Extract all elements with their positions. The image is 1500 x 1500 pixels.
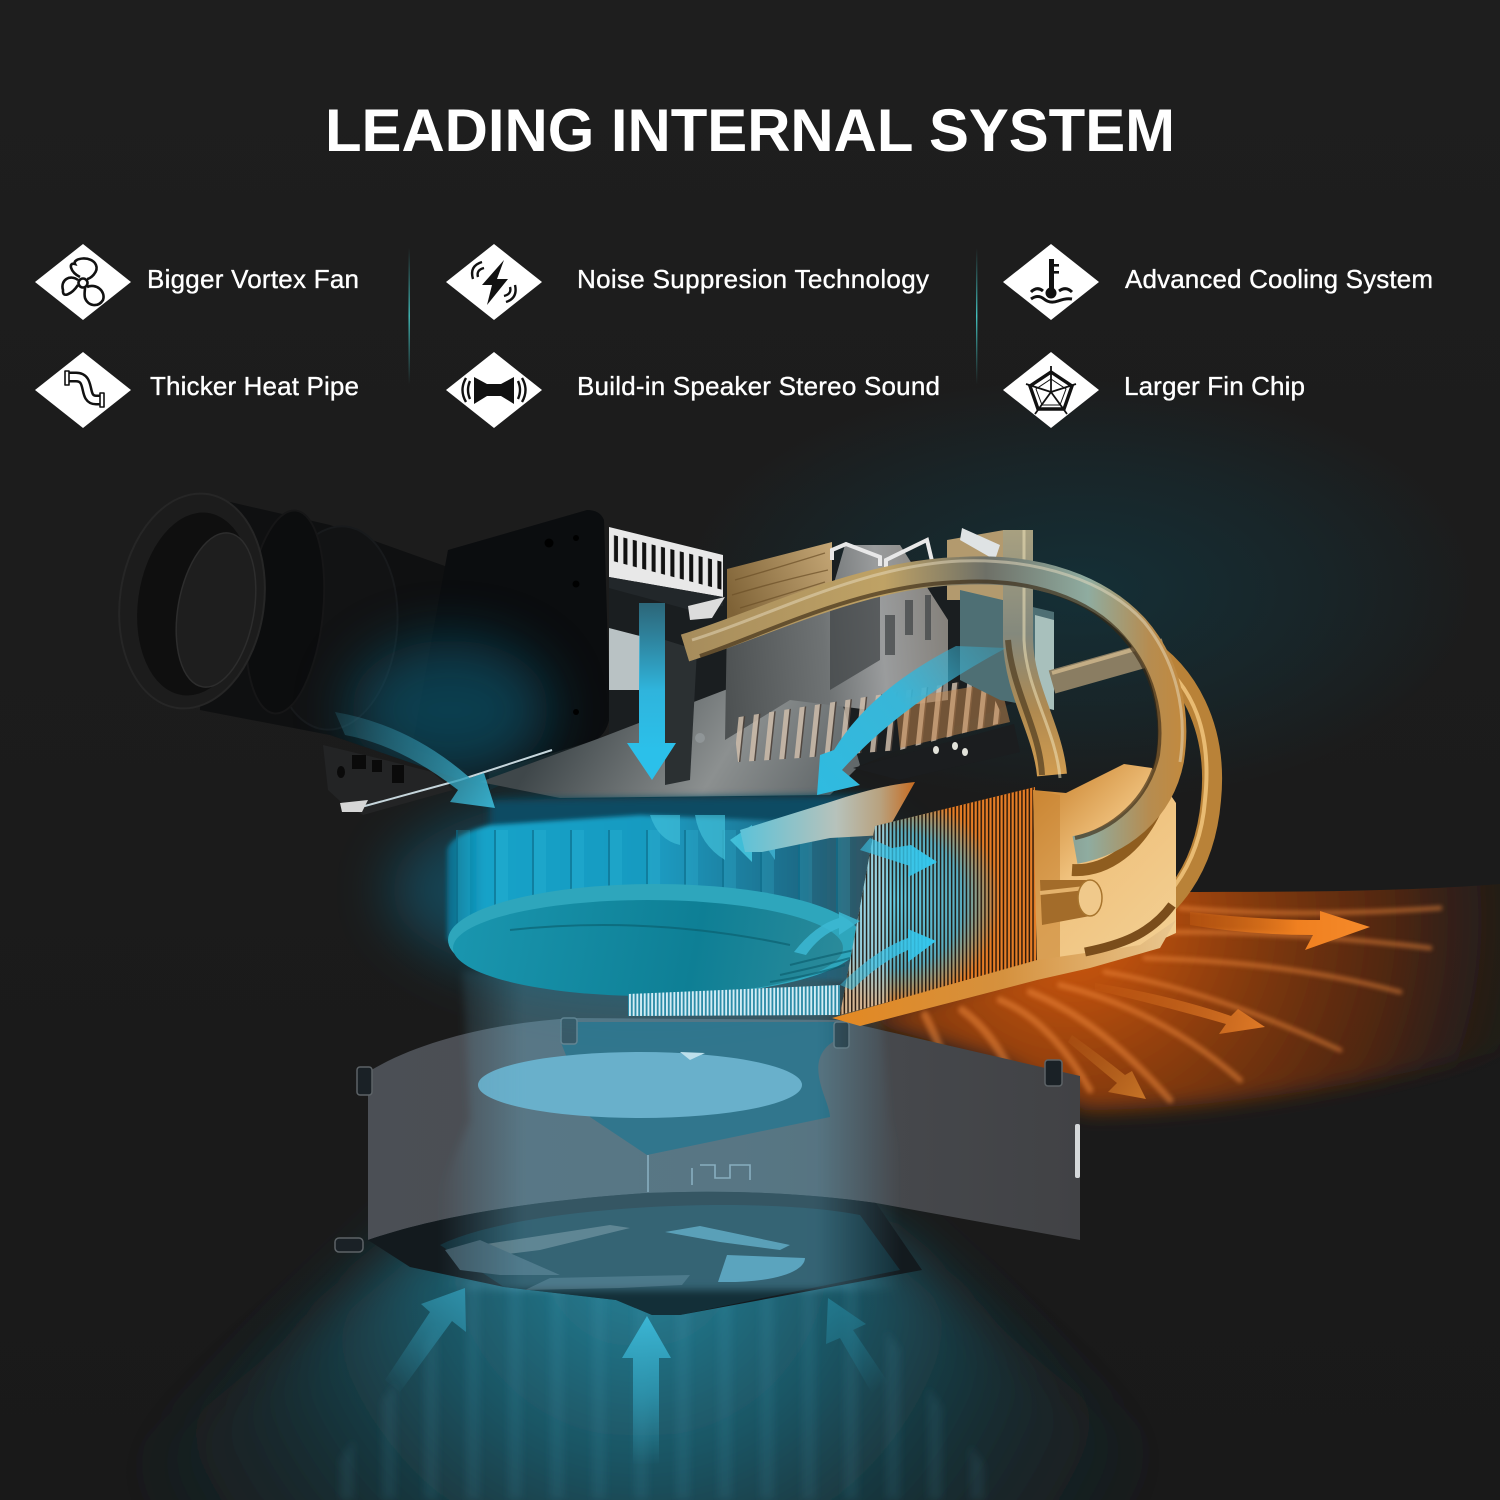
drum top blades xyxy=(650,815,775,862)
white top brackets xyxy=(832,540,932,575)
cold air column xyxy=(400,970,940,1290)
copper lower pins xyxy=(895,682,1010,748)
white comb heatsink xyxy=(609,527,723,597)
label: Build-in Speaker Stereo Sound: Build-in Speaker Stereo Sound xyxy=(577,371,940,401)
copper bottom bar xyxy=(832,920,1176,1026)
white strip fins xyxy=(628,985,840,1016)
label: Advanced Cooling System: Advanced Cooling System xyxy=(1125,264,1433,294)
black mounting plate xyxy=(412,510,610,775)
back pipe highlight xyxy=(1052,642,1160,673)
left pale fade xyxy=(838,820,888,1020)
arrow: intake right xyxy=(826,1298,890,1395)
arrow: fins lower xyxy=(840,929,936,990)
projector lens xyxy=(106,484,610,815)
clip xyxy=(688,597,725,620)
icon: speaker xyxy=(446,352,542,428)
top opening xyxy=(560,1022,836,1155)
cone glow xyxy=(20,1230,1280,1500)
teal glow on lens xyxy=(350,640,550,780)
lower shell xyxy=(335,1018,1080,1315)
arrow: intake centre xyxy=(622,1316,671,1465)
blue cooled area on fins xyxy=(840,787,1037,1015)
label: Bigger Vortex Fan: Bigger Vortex Fan xyxy=(147,264,359,294)
wood texture lines xyxy=(732,553,828,608)
lower left bracket xyxy=(323,745,453,815)
shell wall xyxy=(368,1018,1080,1240)
copper fin stack xyxy=(840,787,1037,1015)
boss highlight xyxy=(1040,888,1085,893)
block left shade xyxy=(1033,790,1060,962)
fan drum xyxy=(447,815,880,985)
drum blade stripes xyxy=(450,830,870,940)
arrow: left curved xyxy=(335,712,495,808)
stripes xyxy=(838,780,1038,1020)
silver dots xyxy=(695,733,968,756)
cone light streaks xyxy=(310,1280,1010,1500)
hot air flow xyxy=(860,860,1500,1110)
block boss stub xyxy=(1040,880,1090,925)
icon: fin chip web xyxy=(1003,352,1099,428)
airflow arrows xyxy=(335,603,1370,1465)
disc ripple xyxy=(510,925,855,982)
shell side slot xyxy=(1075,1124,1080,1178)
vertical pipe xyxy=(1018,530,1052,775)
blue region xyxy=(846,810,998,1002)
second lower pipe xyxy=(1072,800,1160,870)
arrow: intake left xyxy=(385,1288,466,1392)
label: Larger Fin Chip: Larger Fin Chip xyxy=(1124,371,1305,401)
arrow: fins upper xyxy=(860,838,937,877)
vertical pipe shadow xyxy=(1008,640,1042,775)
blower fan xyxy=(447,782,915,1016)
wide silver floor plate xyxy=(480,660,860,798)
comb base shadow xyxy=(609,577,723,610)
dark post xyxy=(665,640,697,785)
lens well xyxy=(126,505,264,703)
boss end xyxy=(1078,880,1102,916)
icon: fan xyxy=(35,244,131,320)
fin base colour xyxy=(840,787,1037,1015)
arrow: orange small xyxy=(1068,1035,1146,1099)
fan left glow xyxy=(390,790,910,990)
icon: heat pipe xyxy=(35,352,131,428)
title: LEADING INTERNAL SYSTEM xyxy=(325,97,1175,164)
mechanism detail blocks xyxy=(830,590,931,690)
orange rays xyxy=(925,908,1440,1100)
outer lens ring xyxy=(106,484,278,718)
main pipe highlight xyxy=(692,561,1182,762)
copper block xyxy=(1033,764,1176,965)
shell base xyxy=(368,1192,922,1315)
bright bracket strip xyxy=(1035,615,1054,710)
main pipe xyxy=(685,570,1172,850)
main pipe dark line xyxy=(700,581,1160,838)
dark mechanism backing xyxy=(609,560,1020,795)
label: Thicker Heat Pipe: Thicker Heat Pipe xyxy=(150,371,359,401)
white bracket tip xyxy=(960,528,1000,560)
fan disc rim xyxy=(448,884,862,996)
teal bracket plate xyxy=(960,590,1054,710)
fan disc xyxy=(453,900,843,996)
heat pins xyxy=(733,678,1005,762)
inner lens xyxy=(165,527,267,693)
bracket edge highlight xyxy=(342,750,552,806)
central mechanism xyxy=(725,545,948,740)
inner bracket xyxy=(648,1155,750,1192)
icon: noise suppression xyxy=(446,244,542,320)
orange exhaust field xyxy=(860,860,1500,1110)
fan vent blades xyxy=(445,1225,805,1290)
rear ring xyxy=(263,520,407,736)
inner disc xyxy=(478,1052,802,1118)
back horizontal pipe xyxy=(1052,650,1165,682)
icon: cooling thermometer xyxy=(1003,244,1099,320)
bright wedge xyxy=(680,1052,705,1060)
shell clips xyxy=(335,1018,1062,1252)
arrow: orange big xyxy=(1190,911,1370,950)
white wall xyxy=(609,628,640,690)
divider 1 xyxy=(408,248,410,384)
vertical pipe highlight xyxy=(1024,530,1060,778)
feature list xyxy=(35,244,1433,428)
lens barrel xyxy=(200,495,490,790)
bracket bright tip xyxy=(340,800,368,812)
copper block and pipes xyxy=(685,530,1212,1026)
comb slots xyxy=(609,534,723,590)
intake air cone xyxy=(20,1230,1280,1500)
fan outer dark ring xyxy=(490,795,880,845)
label: Noise Suppresion Technology: Noise Suppresion Technology xyxy=(577,264,929,294)
arrow: orange medium xyxy=(1095,983,1265,1034)
background teal glow xyxy=(680,380,1480,800)
outer pipe highlight xyxy=(1100,655,1207,942)
arrow: fan disc xyxy=(794,912,860,955)
base teal tint xyxy=(440,1205,900,1315)
silver duct pipe xyxy=(740,782,915,852)
outer pipe xyxy=(1085,640,1212,952)
mid ring xyxy=(237,507,333,717)
copper top plate left xyxy=(727,542,832,622)
bracket notches xyxy=(337,755,404,783)
arrow: downward top xyxy=(627,603,676,780)
copper top plate right xyxy=(947,530,1004,600)
silver heatsink and mechanism xyxy=(480,527,1054,798)
lower curved pipe shade xyxy=(1085,905,1172,952)
rear dark bar xyxy=(853,724,1020,780)
divider 2 xyxy=(976,248,977,384)
plate holes xyxy=(544,535,580,715)
arrow: curved into fan xyxy=(817,646,1006,795)
